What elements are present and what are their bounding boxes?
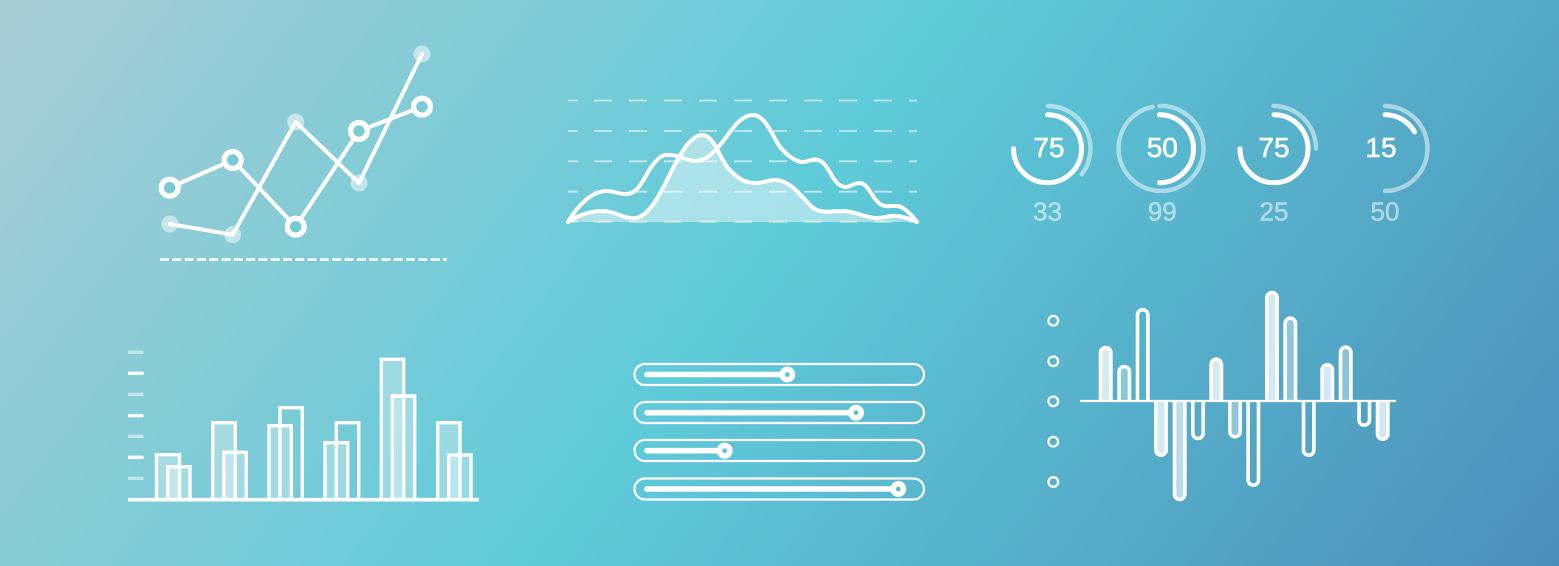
- slider 1: [634, 364, 924, 385]
- zero axis: [1080, 400, 1396, 402]
- ring 75 / 25: [1240, 106, 1316, 226]
- bars group 2: [213, 423, 246, 500]
- ring 50 / 99: 99: [1148, 196, 1177, 226]
- bars group 1: [156, 455, 190, 500]
- y axis ticks: [128, 352, 144, 478]
- bars group 4: [325, 423, 359, 500]
- dashed grid lines: [568, 100, 917, 222]
- bars group 5: [381, 359, 415, 500]
- diverging bars: [1100, 293, 1388, 500]
- dashed baseline: [160, 258, 447, 261]
- bars group 6: [438, 423, 471, 500]
- ring 75 / 25: 25: [1260, 196, 1288, 226]
- ring 15 / 50: [1365, 106, 1428, 226]
- ring 75 / 33: 33: [1033, 196, 1062, 226]
- slider 4: [634, 478, 924, 500]
- slider 2: [634, 402, 924, 423]
- slider 3: [634, 440, 924, 461]
- ring 75 / 25: 75: [1258, 132, 1290, 163]
- panel: progress rings: [1014, 106, 1428, 226]
- ring 75 / 33: 75: [1033, 132, 1065, 163]
- series: light markers line: [161, 46, 430, 243]
- outline curve: [568, 115, 917, 222]
- panel: sliders: [634, 364, 924, 500]
- panel: area chart: [568, 100, 917, 222]
- ring 75 / 33: [1014, 106, 1091, 226]
- scale dots: [1048, 316, 1058, 487]
- ring 15 / 50: 50: [1371, 196, 1399, 226]
- ring 50 / 99: 50: [1147, 132, 1178, 163]
- series: open ring markers line: [161, 98, 430, 235]
- panel: grouped bar chart: [128, 352, 479, 500]
- ring 15 / 50: 15: [1365, 132, 1397, 163]
- panel: line chart: [160, 46, 447, 260]
- x axis: [128, 498, 479, 502]
- bars group 3: [269, 408, 302, 500]
- filled area curve: [568, 135, 917, 222]
- ring 50 / 99: [1119, 106, 1204, 226]
- front curve line: [568, 135, 917, 222]
- panel: diverging bar chart: [1048, 293, 1396, 500]
